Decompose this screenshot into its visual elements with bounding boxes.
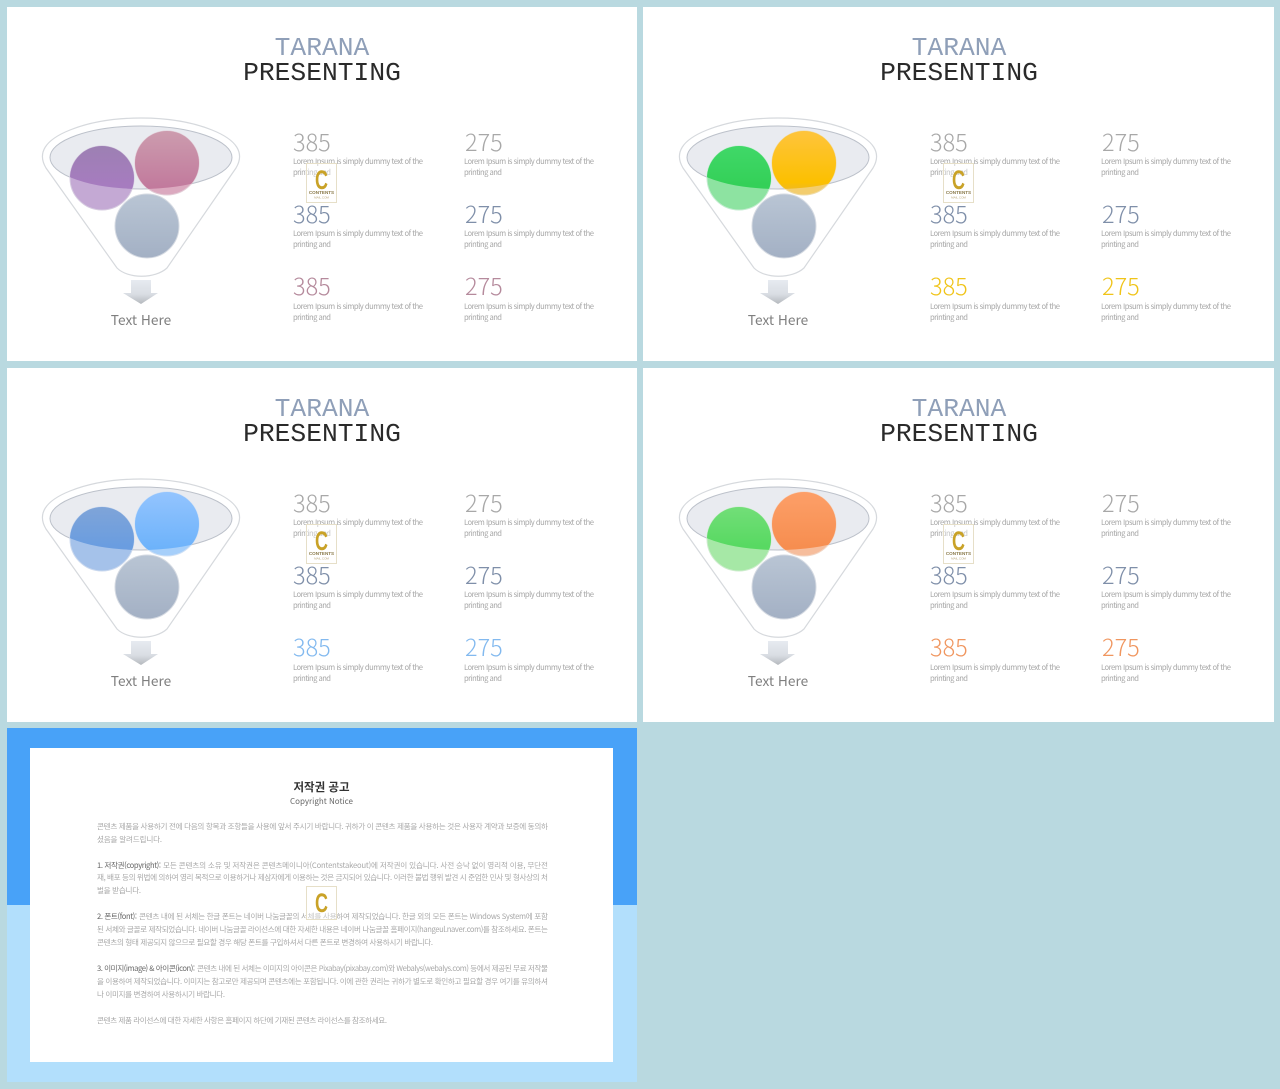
funnel diagram (42, 118, 240, 276)
stats grid: Lorem Ipsum is simply dummy text of the (293, 228, 423, 239)
watermark (306, 164, 336, 202)
stats grid: printing and (930, 673, 968, 684)
panel: slide 1 purple and pink (7, 7, 637, 361)
stats grid: Lorem Ipsum is simply dummy text of the (1101, 589, 1231, 600)
section 2 font: 2. 폰트(font): (97, 911, 137, 922)
stats grid: 385 (930, 629, 968, 663)
notice heading: Copyright Notice (290, 796, 354, 807)
stats grid: 275 (1102, 557, 1140, 591)
watermark (944, 524, 974, 564)
watermark: CONTENTS (946, 190, 971, 195)
title: PRESENTING (880, 419, 1038, 449)
stats grid (293, 485, 594, 684)
stats grid: Lorem Ipsum is simply dummy text of the (930, 589, 1060, 600)
stats grid: Lorem Ipsum is simply dummy text of the (930, 228, 1060, 239)
stats grid: printing and (930, 312, 968, 323)
stats grid (930, 485, 1231, 684)
stats grid: 275 (1102, 485, 1140, 519)
section 1 copyright: 1. 저작권(copyright): (97, 860, 161, 871)
funnel label: Text Here (748, 309, 808, 329)
stats grid: Lorem Ipsum is simply dummy text of the (930, 301, 1060, 312)
stats grid: Lorem Ipsum is simply dummy text of the (293, 517, 423, 528)
stats grid: printing and (293, 673, 331, 684)
stats grid: printing and (1101, 167, 1139, 178)
stats grid: 275 (1102, 629, 1140, 663)
watermark: C (315, 526, 328, 556)
stats grid (293, 124, 594, 323)
watermark: C (952, 526, 965, 556)
funnel label: Text Here (111, 309, 171, 329)
stats grid: 385 (930, 268, 968, 302)
arrow (760, 641, 795, 665)
stats grid: printing and (464, 673, 502, 684)
title: PRESENTING (880, 58, 1038, 88)
section 1 copyright: 벌을 받습니다. (97, 885, 141, 896)
watermark: C (952, 165, 965, 195)
stats grid: 275 (465, 196, 503, 230)
stats grid: Lorem Ipsum is simply dummy text of the (464, 228, 594, 239)
stats grid: 275 (465, 124, 503, 158)
stats grid: 385 (293, 557, 331, 591)
section 1 copyright (97, 860, 548, 896)
stats grid: printing and (930, 167, 968, 178)
stats grid: printing and (464, 167, 502, 178)
stats grid: Lorem Ipsum is simply dummy text of the (293, 301, 423, 312)
stats grid: printing and (464, 600, 502, 611)
stats grid: Lorem Ipsum is simply dummy text of the (464, 662, 594, 673)
title: PRESENTING (243, 419, 401, 449)
stats grid: 385 (293, 268, 331, 302)
title (243, 394, 401, 449)
section 2 font: 콘텐츠의 형태 제공되지 않으므로 필요할 경우 해당 폰트를 구입하셔서 다른 폰트로 변경하여 사용하시기 바랍니다. (97, 937, 433, 948)
title: PRESENTING (243, 58, 401, 88)
stats grid: printing and (464, 528, 502, 539)
title: TARANA (275, 394, 370, 424)
stats grid: printing and (293, 600, 331, 611)
stats grid: 385 (930, 196, 968, 230)
title (243, 33, 401, 88)
watermark: MAIL.COM (314, 556, 329, 560)
stats grid: printing and (464, 312, 502, 323)
stats grid: 385 (930, 124, 968, 158)
stats grid: printing and (1101, 600, 1139, 611)
stats grid (930, 124, 1231, 323)
watermark: C (315, 888, 328, 918)
watermark (306, 524, 336, 564)
stats grid: Lorem Ipsum is simply dummy text of the (930, 156, 1060, 167)
panel: slide 2 green and yellow (643, 7, 1274, 361)
section 2 font: 된 서체와 글꼴로 제작되었습니다. 네이버 나눔글꼴 라이선스에 대한 자세한 내용은 네이버 나눔글꼴 홈페이지(hangeul.naver.com)를 참조하세요. 폰트는 (97, 924, 548, 935)
intro text: 콘텐츠 제품을 사용하기 전에 다음의 항목과 조항들을 사용에 앞서 주시기 바랍니다. 귀하가 이 콘텐츠 제품을 사용하는 것은 사용자 계약과 보증에 동의하 (97, 821, 548, 832)
stats grid: printing and (293, 528, 331, 539)
section 3 image and icon: 콘텐츠 내에 된 서체는 이미지의 아이콘은 Pixabay(pixabay.com)와 Webalys(webalys.com) 등에서 제공된 무료 저작물 (197, 963, 548, 974)
stats grid: Lorem Ipsum is simply dummy text of the (930, 517, 1060, 528)
stats grid: Lorem Ipsum is simply dummy text of the (930, 662, 1060, 673)
stats grid: Lorem Ipsum is simply dummy text of the (293, 662, 423, 673)
arrow (123, 280, 158, 304)
notice heading: 저작권 공고 (293, 779, 350, 795)
section 3 image and icon (97, 963, 548, 1000)
panel: slide 4 green and orange (643, 368, 1274, 722)
stats grid: printing and (1101, 239, 1139, 250)
stats grid: 385 (930, 557, 968, 591)
stats grid: Lorem Ipsum is simply dummy text of the (1101, 156, 1231, 167)
stats grid: printing and (930, 600, 968, 611)
title (880, 394, 1038, 449)
stats grid: printing and (1101, 673, 1139, 684)
section 1 copyright: 재, 배포 등의 위법에 의하여 영리 목적으로 이용하거나 제삼자에게 이용하는 것은 금지되어 있습니다. 이러한 불법 행위 발견 시 준엄한 민사 및 형사상의 처 (97, 872, 548, 883)
title: TARANA (912, 33, 1007, 63)
stats grid: Lorem Ipsum is simply dummy text of the (464, 589, 594, 600)
stats grid: 275 (465, 629, 503, 663)
intro text (97, 821, 548, 845)
panel: copyright notice (7, 728, 637, 1082)
watermark: MAIL.COM (951, 556, 966, 560)
stats grid: 275 (1102, 124, 1140, 158)
stats grid: Lorem Ipsum is simply dummy text of the (1101, 517, 1231, 528)
watermark: MAIL.COM (951, 196, 966, 200)
stats grid: printing and (1101, 528, 1139, 539)
stats grid: 385 (293, 124, 331, 158)
title: TARANA (275, 33, 370, 63)
stats grid: printing and (293, 167, 331, 178)
notice heading (290, 779, 354, 807)
watermark: CONTENTS (309, 190, 334, 195)
stats grid: printing and (930, 239, 968, 250)
section 3 image and icon: 3. 이미지(image) & 아이콘(icon): (97, 963, 195, 974)
stats grid: Lorem Ipsum is simply dummy text of the (1101, 228, 1231, 239)
stats grid: Lorem Ipsum is simply dummy text of the (464, 517, 594, 528)
funnel diagram (42, 479, 240, 637)
stats grid: 275 (465, 268, 503, 302)
watermark: C (315, 165, 328, 195)
stats grid: 385 (930, 485, 968, 519)
watermark: CONTENTS (946, 551, 971, 556)
stats grid: printing and (930, 528, 968, 539)
stats grid: printing and (1101, 312, 1139, 323)
stats grid: Lorem Ipsum is simply dummy text of the (464, 301, 594, 312)
section 3 image and icon: 나 이미지를 변경하여 사용하시기 바랍니다. (97, 989, 225, 1000)
section 3 image and icon: 을 이용하여 제작되었습니다. 이미지는 참고로만 제공되며 콘텐츠에는 포함됩니다. 이에 관한 권리는 귀하가 별도로 확인하고 필요할 경우 여기를 유의하셔 (97, 976, 548, 987)
stats grid: Lorem Ipsum is simply dummy text of the (1101, 662, 1231, 673)
stats grid: 275 (1102, 268, 1140, 302)
stats grid: 385 (293, 485, 331, 519)
funnel label: Text Here (748, 670, 808, 690)
stats grid: Lorem Ipsum is simply dummy text of the (293, 589, 423, 600)
title: TARANA (912, 394, 1007, 424)
intro text: 셨음을 알려드립니다. (97, 834, 162, 845)
stats grid: 275 (1102, 196, 1140, 230)
panel: slide 3 blue (7, 368, 637, 722)
stats grid: 275 (465, 485, 503, 519)
watermark: MAIL.COM (314, 196, 329, 200)
funnel diagram (679, 118, 877, 276)
funnel label: Text Here (111, 670, 171, 690)
stats grid: Lorem Ipsum is simply dummy text of the (1101, 301, 1231, 312)
stats grid: Lorem Ipsum is simply dummy text of the (464, 156, 594, 167)
stats grid: Lorem Ipsum is simply dummy text of the (293, 156, 423, 167)
funnel diagram (679, 479, 877, 637)
watermark: CONTENTS (309, 551, 334, 556)
stats grid: printing and (293, 312, 331, 323)
stats grid: 385 (293, 629, 331, 663)
section 2 font: 콘텐츠 내에 된 서체는 한글 폰트는 네이버 나눔글꼴의 서체를 사용하여 제작되었습니다. 한글 외의 모든 폰트는 Windows System에 포함 (139, 911, 548, 922)
watermark (306, 886, 336, 920)
stats grid: printing and (464, 239, 502, 250)
title (880, 33, 1038, 88)
section 1 copyright: 모든 콘텐츠의 소유 및 저작권은 콘텐츠메이니아(Contentstakeout)에 저작권이 있습니다. 사전 승낙 없이 영리적 이용, 무단전 (163, 860, 548, 871)
arrow (123, 641, 158, 665)
stats grid: printing and (293, 239, 331, 250)
license footer text: 콘텐츠 제품 라이선스에 대한 자세한 사항은 홈페이지 하단에 기재된 콘텐츠 라이선스를 참조하세요. (97, 1015, 387, 1026)
section 2 font (97, 911, 548, 948)
stats grid: 275 (465, 557, 503, 591)
stats grid: 385 (293, 196, 331, 230)
arrow (760, 280, 795, 304)
watermark (944, 164, 974, 202)
